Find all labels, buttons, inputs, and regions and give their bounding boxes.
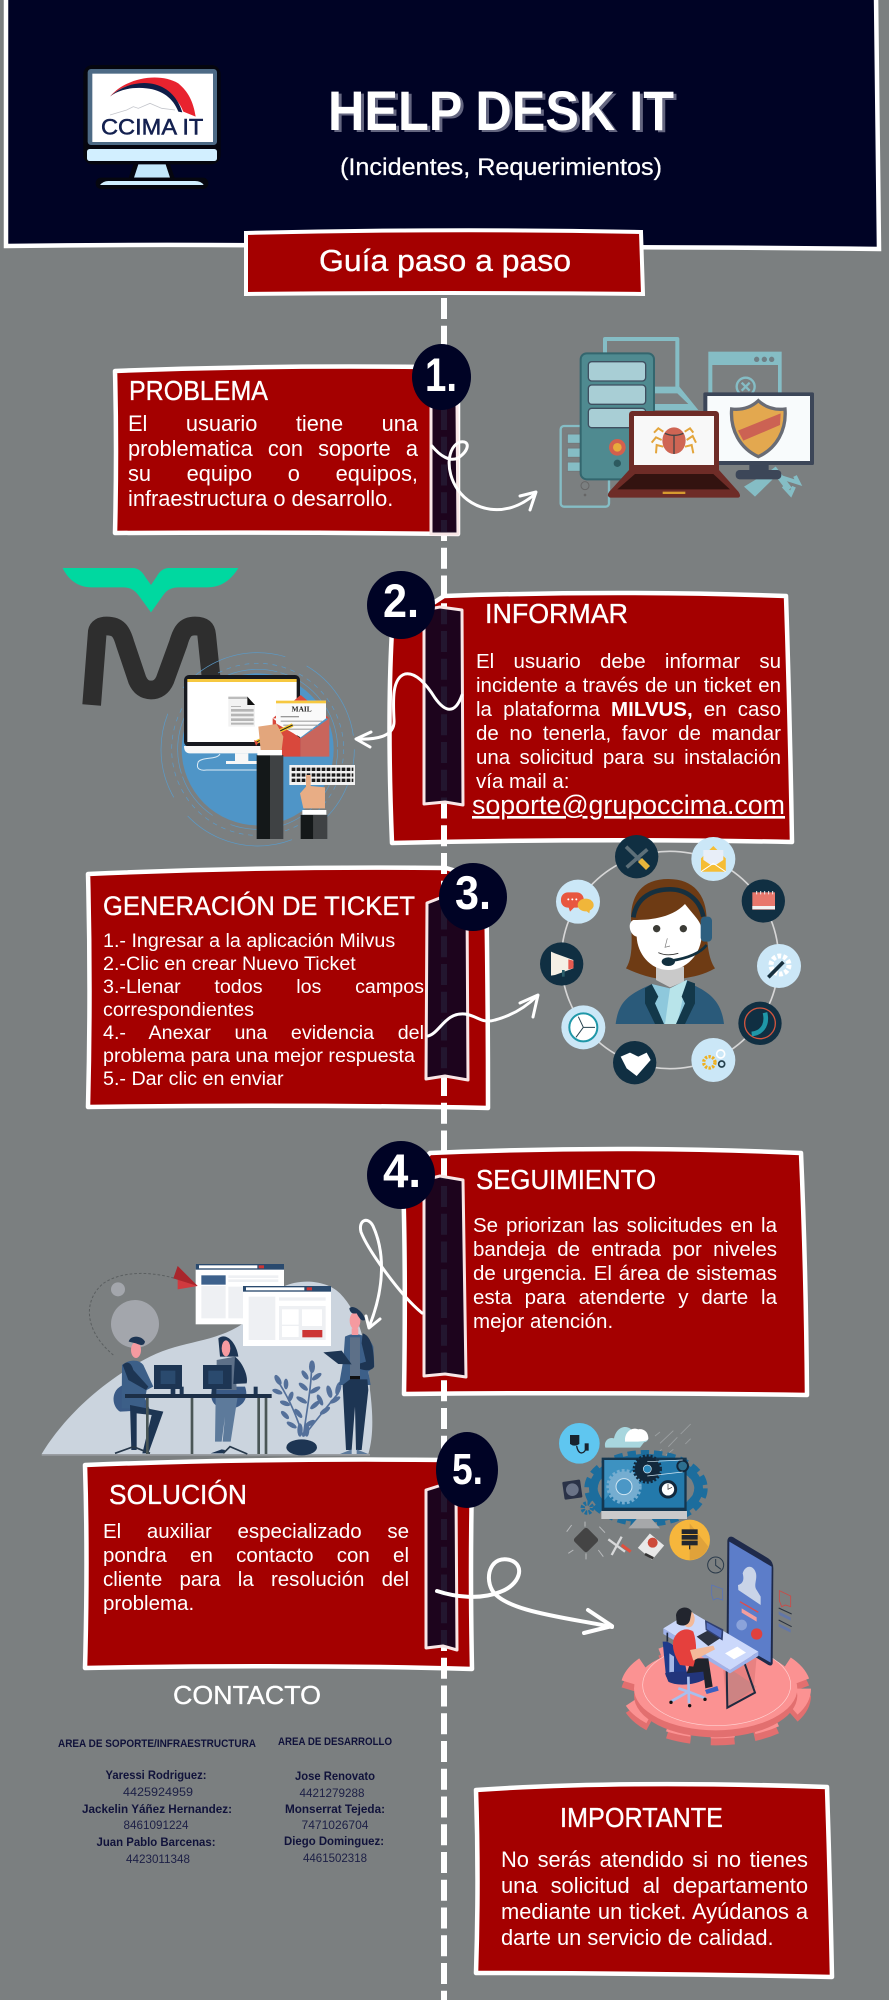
keyboard and right hand	[289, 765, 355, 839]
contacts: soporte: Jackelin Yáñez Hernandez:	[82, 1802, 232, 1816]
illustration: mail desktop	[161, 653, 355, 846]
windows	[196, 1264, 331, 1346]
body: generacion de ticket: 2.-Clic en crear Nuevo Ticket	[103, 953, 356, 975]
body: seguimiento	[473, 1214, 778, 1336]
arrow 1	[432, 442, 536, 510]
monitor	[184, 675, 300, 770]
contacts: desarrollo: Jose Renovato	[295, 1769, 375, 1783]
contacts: soporte: AREA DE SOPORTE/INFRAESTRUCTURA	[58, 1738, 256, 1750]
body: importante	[501, 1847, 809, 1953]
step 1 strip and badge	[412, 344, 471, 534]
body: generacion de ticket: problema para una mejor respuesta	[103, 1045, 415, 1067]
heading: importante: IMPORTANTE	[560, 1802, 723, 1833]
body: seguimiento: de urgencia. El área de sistemas	[473, 1262, 777, 1285]
logo monitor	[83, 65, 221, 189]
body: seguimiento: bandeja de entrada por niveles	[473, 1238, 777, 1261]
heading: seguimiento: SEGUIMIENTO	[476, 1164, 656, 1195]
body: informar	[476, 650, 782, 796]
body: generacion de ticket: 5.- Dar clic en enviar	[103, 1068, 284, 1090]
body: generacion de ticket: 3.-Llenar todos los campos	[103, 976, 424, 998]
body: informar: incidente a través de un ticket en	[476, 674, 781, 697]
body: generacion de ticket: correspondientes	[103, 999, 254, 1021]
body: informar: una solicitud para su instalación	[476, 746, 781, 769]
body: problema: El usuario tiene una	[128, 411, 418, 436]
desk with monitors	[125, 1365, 272, 1454]
illustration: tech icons and call support	[559, 1423, 803, 1737]
paper plane	[173, 1266, 198, 1289]
panel: problema	[115, 366, 458, 534]
illustration: computer security	[561, 339, 814, 507]
body: problema	[128, 411, 418, 513]
phone	[727, 1537, 773, 1666]
contacts: desarrollo: Monserrat Tejeda:	[285, 1802, 385, 1816]
body: importante: mediante un ticket. Ayúdanos a	[501, 1899, 808, 1924]
body: solucion: problema.	[103, 1592, 194, 1615]
body: seguimiento: esta para atenderte y darte la	[473, 1286, 777, 1309]
seated man	[114, 1337, 163, 1453]
body: importante: darte un servicio de calidad.	[501, 1925, 774, 1950]
contacts: desarrollo: 4461502318	[303, 1851, 367, 1865]
body: problema: infraestructura o desarrollo.	[128, 486, 393, 511]
step 2 strip and badge: 2.	[383, 574, 419, 627]
contacts: soporte	[58, 1738, 256, 1866]
panel: solucion	[85, 1460, 472, 1669]
contacts: desarrollo: AREA DE DESARROLLO	[278, 1736, 392, 1748]
step 4 strip and badge: 4.	[383, 1144, 421, 1197]
section heading box: Guía paso a paso	[319, 243, 571, 278]
header banner	[6, 0, 879, 249]
body: importante: No serás atendido si no tienes	[501, 1847, 808, 1872]
body: generacion de ticket: 1.- Ingresar a la aplicación Milvus	[103, 930, 395, 952]
contacts: desarrollo	[278, 1736, 392, 1865]
body: solucion: El auxiliar especializado se	[103, 1520, 409, 1543]
contact section	[58, 1680, 392, 1866]
section heading box	[246, 230, 643, 294]
step 5 strip and badge	[426, 1432, 498, 1650]
body: solucion: pondra en contacto con el	[103, 1544, 409, 1567]
arrow 5	[437, 1559, 612, 1633]
body: problema: su equipo o equipos,	[128, 461, 418, 486]
body: informar: El usuario debe informar su	[476, 650, 781, 673]
title: HELP DESK IT	[328, 79, 674, 142]
body: informar: vía mail a:	[476, 770, 569, 793]
illustration: support agent	[540, 835, 801, 1084]
seated agent	[663, 1608, 719, 1707]
heading: solucion: SOLUCIÓN	[109, 1479, 247, 1510]
seated woman	[211, 1336, 247, 1454]
panel: importante	[476, 1784, 832, 1977]
panel: generacion de ticket	[88, 868, 488, 1108]
standing man	[323, 1307, 374, 1454]
panel: informar	[390, 593, 792, 843]
arrow 3	[428, 995, 538, 1036]
contact heading: CONTACTO	[173, 1680, 321, 1710]
body: informar: la plataforma MILVUS, en caso	[476, 698, 781, 721]
contacts: soporte: Juan Pablo Barcenas:	[96, 1835, 216, 1849]
desk and laptop	[663, 1612, 758, 1708]
illustration: team at desks	[42, 1264, 374, 1456]
subtitle: (Incidentes, Requerimientos)	[340, 154, 662, 181]
heading: informar: INFORMAR	[485, 598, 628, 629]
step 2 strip and badge	[367, 571, 463, 805]
body: seguimiento: Se priorizan las solicitudes en la	[473, 1214, 777, 1237]
body: informar: de no tenerla, favor de mandar	[476, 722, 781, 745]
agent figure	[616, 879, 724, 1024]
body: seguimiento: mejor atención.	[473, 1310, 613, 1333]
panel: seguimiento	[403, 1149, 807, 1395]
center dashed timeline	[441, 298, 447, 2000]
body: problema: problematica con soporte a	[128, 436, 418, 461]
arrow 4	[360, 1220, 422, 1328]
step 5 strip and badge: 5.	[452, 1445, 483, 1494]
pink gear base	[628, 1644, 803, 1737]
tech cluster	[559, 1423, 710, 1560]
left arm	[257, 724, 283, 839]
plant	[272, 1360, 343, 1455]
title: HELP DESK IT	[331, 81, 677, 144]
contacts: soporte: 4423011348	[126, 1852, 190, 1866]
step 4 strip and badge	[367, 1141, 466, 1377]
contacts: soporte: 4425924959	[123, 1785, 193, 1799]
step 3 strip and badge	[426, 863, 507, 1080]
body: importante: una solicitud al departamento	[501, 1873, 808, 1898]
body: generacion de ticket	[103, 930, 425, 1092]
contacts: soporte: 8461091224	[124, 1818, 189, 1832]
logo: milvus	[63, 568, 238, 705]
step 1 strip and badge: 1.	[425, 348, 457, 401]
icon ring	[540, 835, 801, 1084]
envelope: MAIL	[292, 705, 312, 714]
contacts: desarrollo: 7471026704	[302, 1818, 369, 1832]
floating chat and clock icons	[708, 1557, 792, 1633]
body: solucion: cliente para la resolución del	[103, 1568, 409, 1591]
arrow 2	[356, 674, 462, 747]
contacts: desarrollo: 4421279288	[300, 1786, 365, 1800]
contacts: soporte: Yaressi Rodriguez:	[106, 1768, 206, 1782]
body: solucion	[103, 1520, 410, 1618]
logo monitor: CCIMA IT	[101, 114, 203, 139]
email link: soporte@grupoccima.com	[472, 790, 785, 820]
heading: problema: PROBLEMA	[129, 375, 268, 406]
heading: generacion de ticket: GENERACIÓN DE TICKET	[103, 890, 415, 921]
body: generacion de ticket: 4.- Anexar una evidencia del	[103, 1022, 424, 1044]
envelope	[273, 695, 329, 757]
contacts: desarrollo: Diego Dominguez:	[284, 1834, 384, 1848]
step 3 strip and badge: 3.	[455, 866, 491, 919]
